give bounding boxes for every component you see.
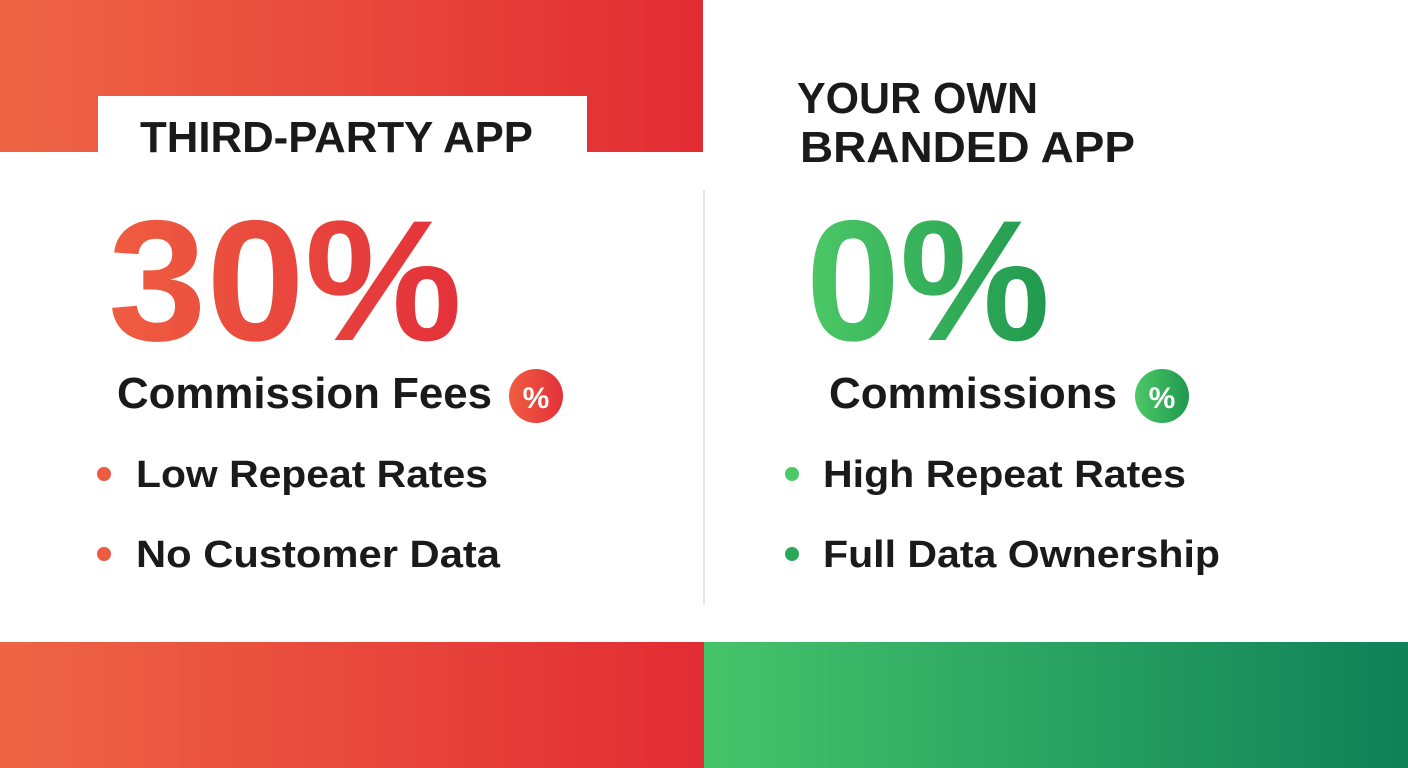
left bullet list: Low Repeat Rates: [136, 454, 488, 496]
title: your own branded app: BRANDED APP: [800, 123, 1135, 172]
icon: red percent badge: [509, 369, 563, 423]
title box: third-party app: THIRD-PARTY APP: [140, 113, 533, 162]
title: your own branded app: [797, 74, 1135, 172]
title: your own branded app: YOUR OWN: [797, 74, 1038, 123]
bottom red bar: [0, 642, 704, 768]
title box: third-party app: [98, 96, 587, 162]
right bullet list: [785, 454, 1220, 576]
top red banner: [0, 0, 703, 152]
icon: green percent badge: [1135, 369, 1189, 423]
bottom green bar: [704, 642, 1408, 768]
center divider: [703, 190, 705, 605]
icon: red percent badge: %: [523, 382, 549, 415]
icon: green percent badge: %: [1149, 382, 1175, 415]
left bullet list: No Customer Data: [136, 534, 501, 576]
left bullet list: [97, 454, 501, 576]
label: commissions: Commissions: [829, 369, 1117, 418]
label: commission fees: Commission Fees: [117, 369, 492, 418]
big stat: 30%: 30%: [108, 185, 462, 377]
right bullet list: Full Data Ownership: [823, 534, 1220, 576]
big stat: 0%: 0%: [806, 185, 1050, 377]
right bullet list: High Repeat Rates: [823, 454, 1186, 496]
